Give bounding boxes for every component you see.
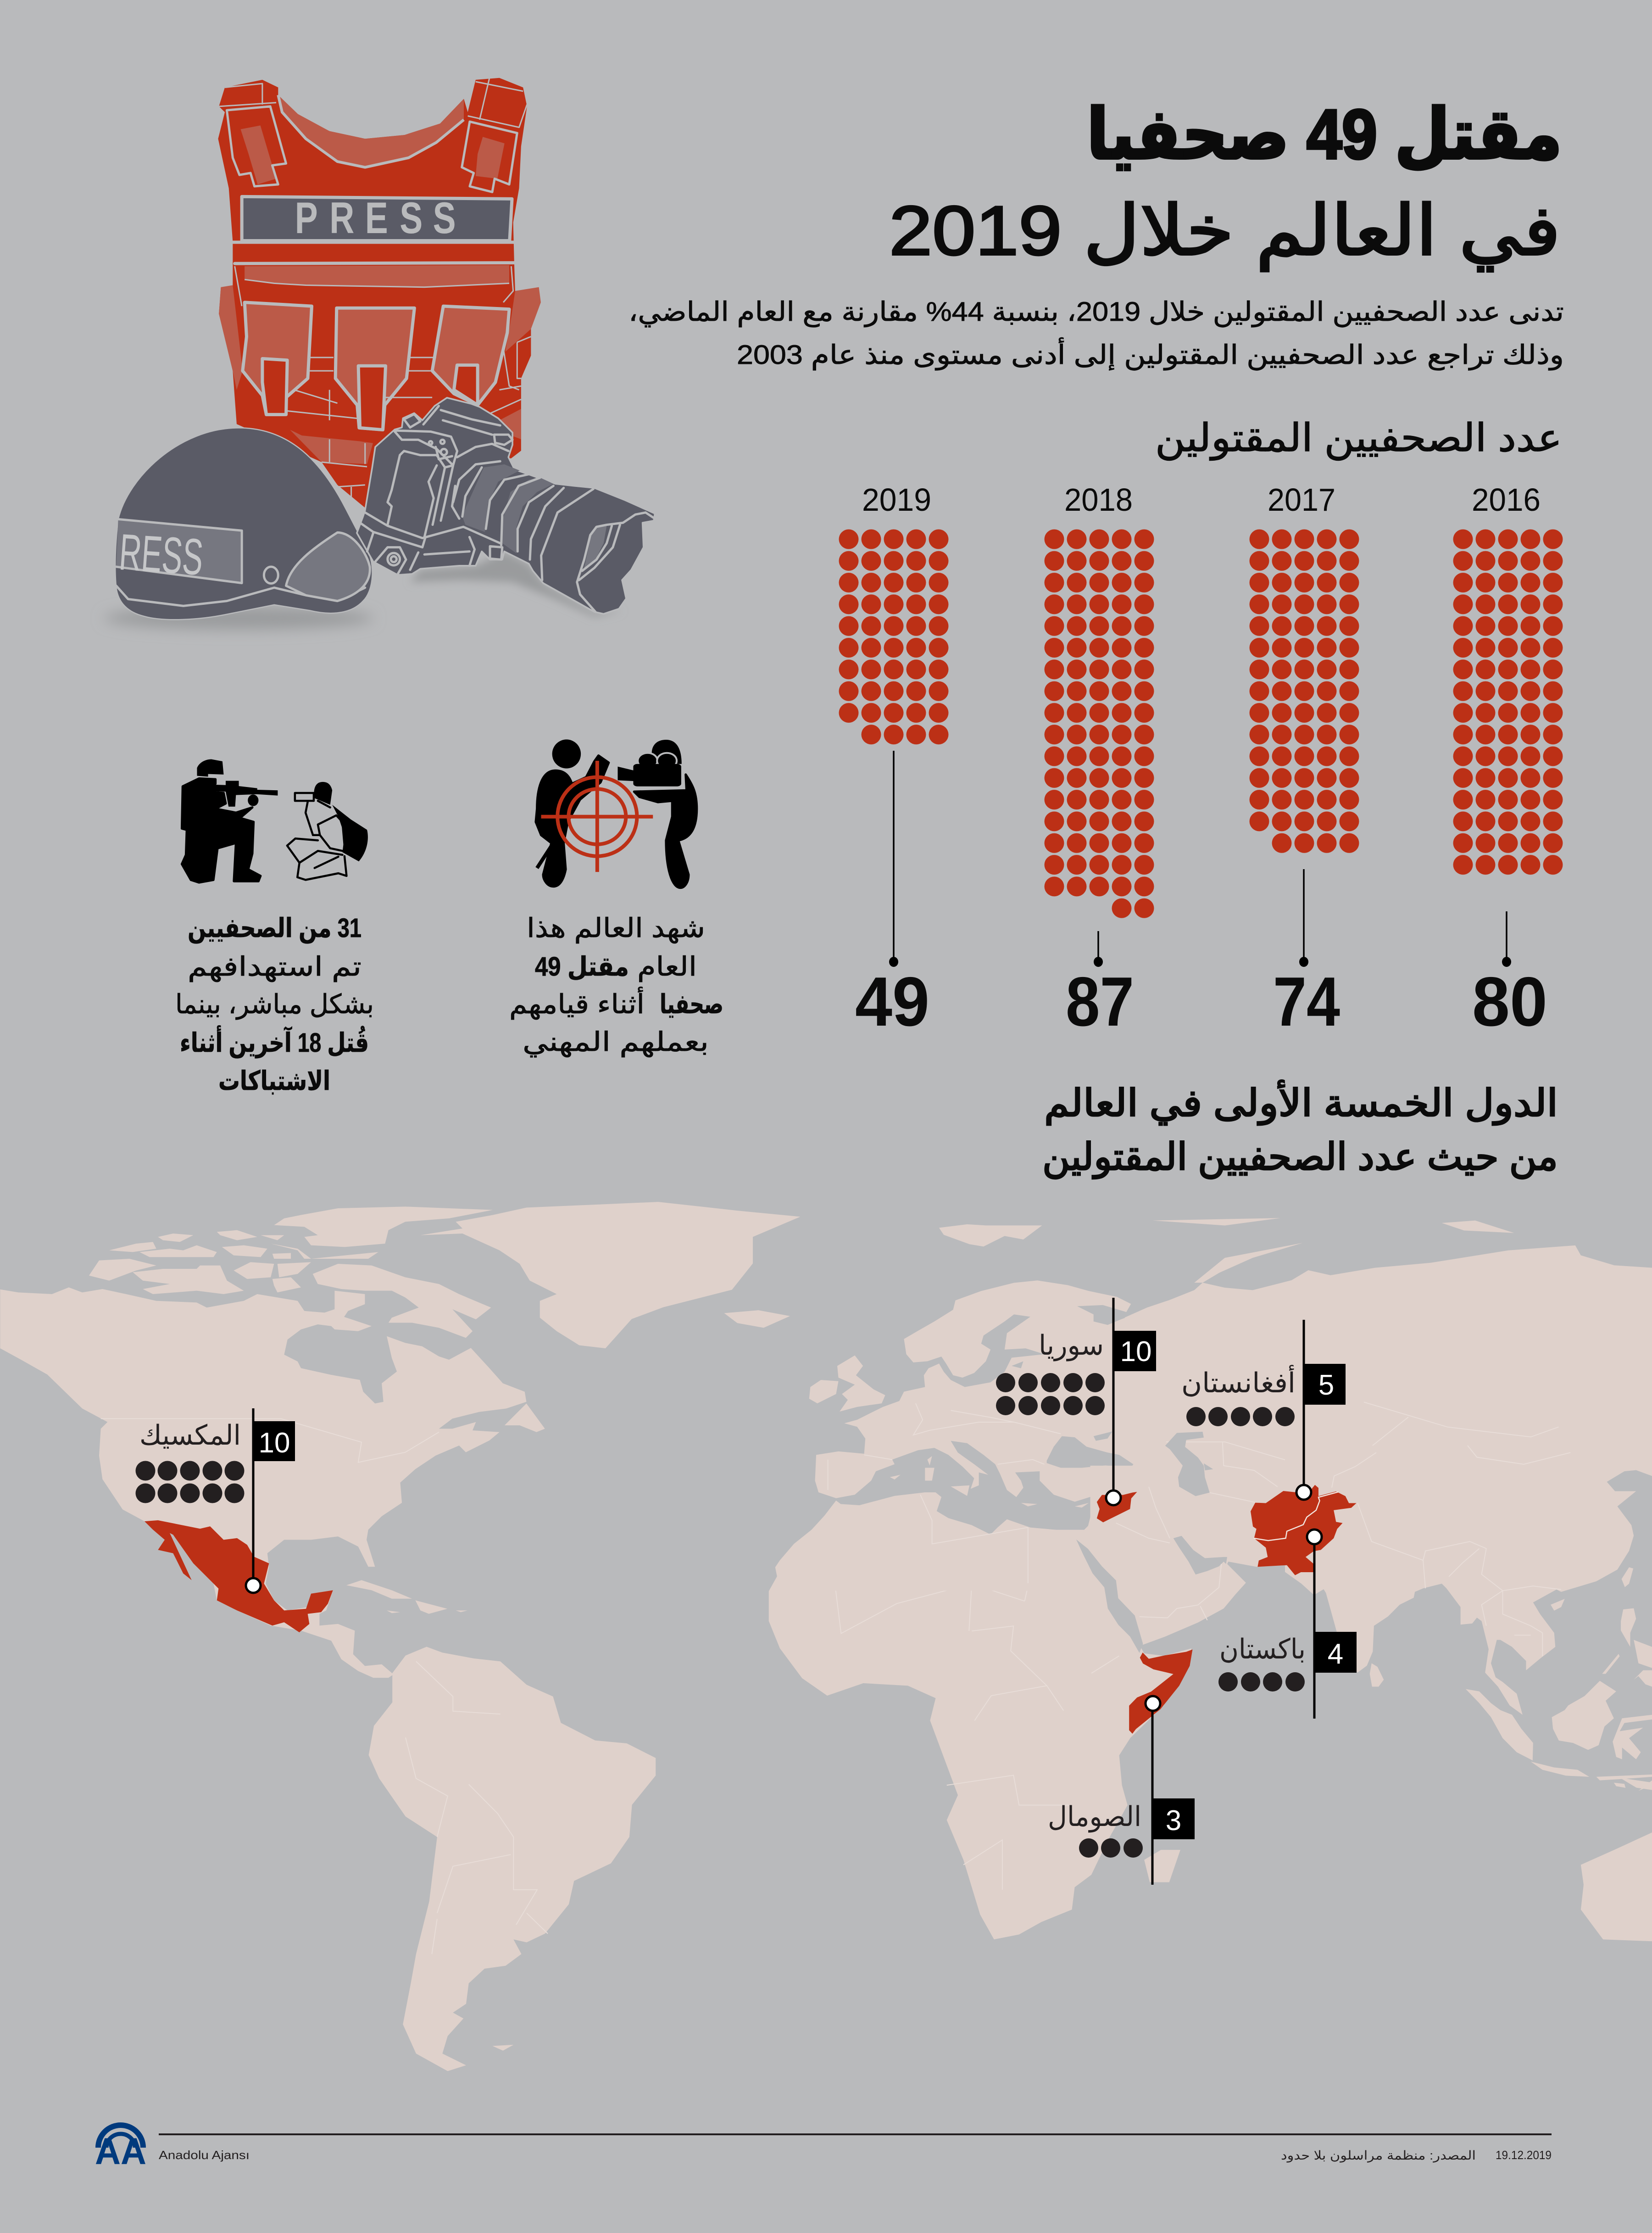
year column 2019	[838, 482, 950, 1041]
map: Africa, northern Asia and Australia	[769, 1218, 1652, 1942]
heading: top five countries: الدول الخمسة الأولى في العالم	[1044, 1080, 1558, 1125]
title line 1: مقتل 49 صحفيا	[1087, 95, 1562, 173]
icon: journalists in crosshair	[536, 739, 697, 888]
marker: Pakistan 4: 4	[1328, 1638, 1343, 1670]
agency name: Anadolu Ajansı	[159, 2148, 250, 2162]
map: North America, Arctic and Greenland	[0, 1202, 800, 1678]
marker: Pakistan 4	[1218, 1530, 1357, 1719]
title line 2: في العالم خلال 2019	[889, 192, 1561, 272]
marker: Syria 10: 10	[1120, 1336, 1151, 1368]
text block: journalists killed at work: أثناء قيامهم	[509, 987, 645, 1020]
logo: Anadolu Agency: AA	[95, 2131, 146, 2172]
text block: journalists killed at work: مقتل 49	[535, 952, 629, 982]
heading: top five countries	[1042, 1080, 1558, 1179]
text block: targeted and crossfire: 31 من الصحفيين	[188, 913, 362, 944]
map: Europe and North Africa	[775, 1224, 1166, 1591]
text block: targeted and crossfire: الاشتباكات	[218, 1066, 330, 1096]
date: 19.12.2019	[1496, 2148, 1552, 2162]
highlighted country: Syria	[1097, 1492, 1137, 1522]
world map	[0, 1202, 1652, 2071]
press vest	[218, 78, 541, 508]
dot chart: killed journalists per year	[838, 482, 1564, 1041]
heading: top five countries: من حيث عدد الصحفيين المقتولين	[1042, 1136, 1558, 1179]
year column 2016: 2016	[1472, 482, 1541, 518]
highlighted country: Somalia	[1129, 1649, 1192, 1734]
marker: Somalia 3: الصومال	[1048, 1801, 1141, 1833]
year column 2018	[1043, 482, 1155, 1041]
marker: Mexico 10: 10	[259, 1427, 290, 1459]
intro paragraph: وذلك تراجع عدد الصحفيين المقتولين إلى أدنى مستوى منذ عام 2003	[737, 337, 1564, 371]
marker: Afghanistan 5: أفغانستان	[1181, 1365, 1296, 1398]
marker: Pakistan 4: باكستان	[1219, 1634, 1306, 1664]
year column 2018: 2018	[1064, 482, 1133, 518]
footer rule	[159, 2133, 1552, 2135]
camera	[357, 398, 655, 614]
year column 2016	[1452, 482, 1564, 1041]
heading: killed journalists: عدد الصحفيين المقتولين	[1155, 416, 1562, 461]
map: Iceland, South America	[369, 1310, 790, 2071]
source: المصدر: منظمة مراسلون بلا حدود	[1281, 2149, 1476, 2163]
marker: Syria 10: سوريا	[1039, 1330, 1104, 1362]
illustration: vest, helmet and camera	[104, 78, 655, 630]
year column 2017: 74	[1273, 963, 1340, 1041]
map: South and East Asia	[1285, 1446, 1652, 1791]
text block: targeted and crossfire: بشكل مباشر، بينما	[175, 989, 374, 1020]
marker: Syria 10	[996, 1298, 1156, 1505]
map: Middle East and Central Asia	[1076, 1432, 1422, 1653]
text block: journalists killed at work: صحفيا	[660, 989, 723, 1019]
marker: Somalia 3: 3	[1166, 1805, 1181, 1837]
marker: Afghanistan 5	[1181, 1320, 1346, 1500]
text block: targeted and crossfire	[175, 913, 374, 1096]
year column 2016: 80	[1472, 963, 1547, 1041]
text block: journalists killed at work: العام	[637, 952, 697, 982]
text block: targeted and crossfire: قُتل 18 آخرين أثناء	[180, 1025, 369, 1059]
text block: journalists killed at work: شهد العالم هذا	[527, 913, 705, 943]
year column 2017	[1248, 482, 1361, 1041]
year column 2018: 87	[1066, 963, 1134, 1041]
year column 2019: 2019	[862, 482, 931, 518]
intro paragraph	[629, 297, 1564, 371]
press label: PRESS	[295, 194, 456, 243]
icon: soldier aiming at photographer	[182, 759, 368, 882]
marker: Afghanistan 5: 5	[1318, 1369, 1334, 1401]
helmet	[115, 428, 373, 620]
intro paragraph: تدنى عدد الصحفيين المقتولين خلال 2019، بنسبة 44% مقارنة مع العام الماضي،	[629, 297, 1564, 328]
text block: journalists killed at work: بعملهم المهني	[523, 1027, 709, 1058]
title	[889, 95, 1562, 272]
marker: Mexico 10	[136, 1408, 295, 1593]
year column 2019: 49	[855, 963, 929, 1041]
text block: journalists killed at work	[509, 913, 723, 1058]
press band	[242, 196, 512, 241]
text block: targeted and crossfire: تم استهدافهم	[188, 952, 362, 982]
highlighted country: Mexico	[145, 1520, 333, 1632]
marker: Somalia 3	[1048, 1696, 1195, 1885]
highlighted countries: Afghanistan and Pakistan	[1251, 1485, 1357, 1575]
helmet press label: RESS	[117, 524, 205, 586]
year column 2017: 2017	[1268, 482, 1335, 518]
shadows	[104, 552, 623, 630]
marker: Mexico 10: المكسيك	[139, 1420, 241, 1451]
